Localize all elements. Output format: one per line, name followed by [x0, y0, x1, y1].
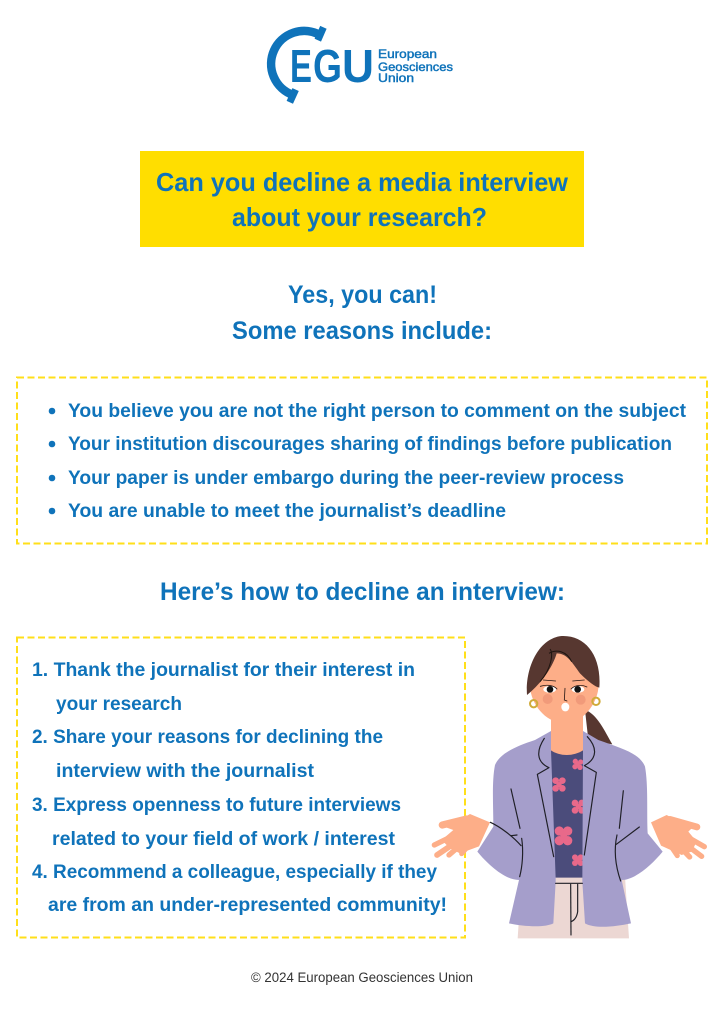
neck [551, 715, 583, 758]
left hand [434, 814, 490, 855]
subheading: reasons: Yes, you can! [288, 281, 437, 309]
panel: reasons list: You believe you are not the right person to comment on the subject [68, 401, 687, 422]
panel: steps list: related to your field of work / interest [52, 828, 395, 850]
logo: European Geosciences Union [271, 27, 453, 102]
panel: steps list [17, 638, 465, 938]
panel: steps list: interview with the journalist [56, 760, 314, 782]
logo: European Geosciences Union: E [290, 40, 312, 92]
ponytail [585, 710, 612, 744]
hair [527, 636, 600, 695]
subheading: reasons: Some reasons include: [232, 317, 492, 345]
head [530, 648, 598, 723]
subheading: reasons [232, 281, 492, 345]
trousers [518, 877, 629, 938]
logo: European Geosciences Union: European [378, 47, 437, 61]
logo: European Geosciences Union: G [313, 40, 342, 92]
panel: reasons list: You are unable to meet the journalist’s deadline [68, 501, 506, 522]
logo: European Geosciences Union: Union [378, 71, 414, 85]
right hand [651, 815, 704, 857]
illustration: woman shrugging [434, 636, 704, 938]
panel: steps list: 4. Recommend a colleague, especially if they [32, 861, 437, 883]
logo: European Geosciences Union: Geosciences [378, 60, 453, 74]
heading: how to decline: Here’s how to decline an interview: [160, 578, 565, 606]
jacket [477, 731, 556, 926]
panel: reasons list [17, 378, 707, 544]
panel: steps list: 1. Thank the journalist for their interest in [32, 659, 415, 681]
panel: steps list: are from an under-represented community! [48, 894, 447, 916]
panel: reasons list: Your paper is under embargo during the peer-review process [68, 468, 624, 489]
face [530, 680, 600, 711]
panel: reasons list: Your institution discourages sharing of findings before publication [68, 434, 672, 455]
footer copyright: © 2024 European Geosciences Union [251, 970, 473, 985]
top [550, 750, 584, 878]
panel: steps list: 2. Share your reasons for declining the [32, 726, 383, 748]
flowers [552, 759, 585, 866]
jacket lines [490, 737, 639, 935]
title banner: about your research? [232, 202, 487, 232]
logo: European Geosciences Union: U [342, 40, 374, 92]
panel: steps list: 3. Express openness to future interviews [32, 794, 401, 816]
title banner: Can you decline a media interview [156, 167, 569, 197]
title banner [140, 151, 584, 247]
panel: steps list: your research [56, 693, 182, 715]
